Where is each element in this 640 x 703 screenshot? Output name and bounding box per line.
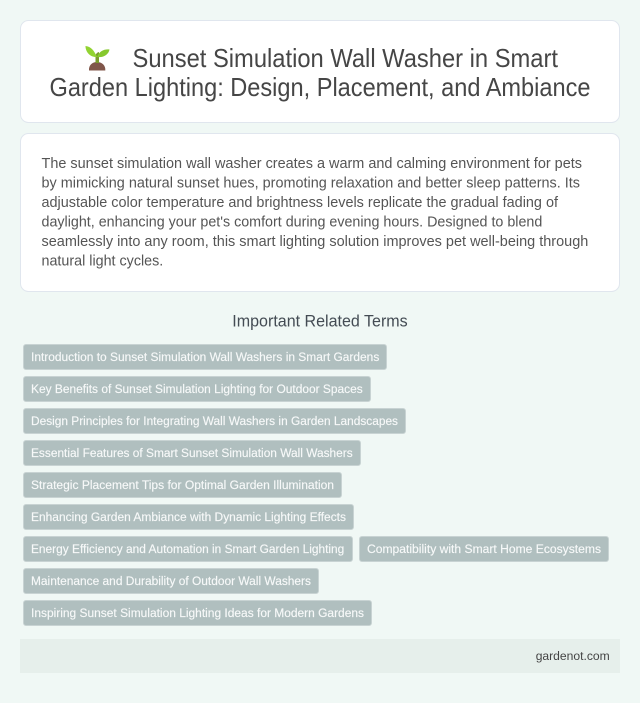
panel: description card <box>20 134 620 292</box>
footer bar <box>20 639 620 673</box>
tag: strategic placement <box>24 472 342 498</box>
text block: description: daylight, enhancing your pet's comfort during evening hours. Designed to blend <box>42 214 542 230</box>
tag: introduction: Introduction to Sunset Simulation Wall Washers in Smart Gardens <box>31 350 379 364</box>
tag: energy efficiency <box>24 536 352 562</box>
tag: enhancing ambiance <box>24 504 354 530</box>
text block: description: The sunset simulation wall washer creates a warm and calming environment for pets <box>42 156 582 172</box>
text block: description: by mimicking natural sunset hues, promoting relaxation and better sleep patterns. Its <box>42 176 580 192</box>
tag: energy efficiency: Energy Efficiency and Automation in Smart Garden Lighting <box>31 542 344 556</box>
tag: key benefits: Key Benefits of Sunset Simulation Lighting for Outdoor Spaces <box>31 382 363 396</box>
tag: design principles: Design Principles for Integrating Wall Washers in Garden Landscapes <box>31 414 398 428</box>
panel: title card <box>20 20 620 122</box>
text block: description: adjustable color temperature and brightness levels replicate the gradual fading of <box>42 195 559 211</box>
title: Sunset Simulation Wall Washer in Smart <box>132 43 559 73</box>
text block: description: seamlessly into any room, this smart lighting solution improves pet well-being through <box>42 234 588 250</box>
tag: maintenance: Maintenance and Durability of Outdoor Wall Washers <box>31 574 311 588</box>
tag: key benefits <box>24 376 370 402</box>
tag: maintenance <box>24 568 318 594</box>
title <box>50 43 590 102</box>
heading: important related terms: Important Related Terms <box>232 312 408 330</box>
tag: introduction <box>24 344 386 370</box>
tag: inspiring ideas: Inspiring Sunset Simulation Lighting Ideas for Modern Gardens <box>31 606 364 620</box>
text block: description <box>42 156 588 270</box>
icon: sprout <box>86 46 110 70</box>
panel: related term tags <box>24 344 608 626</box>
tag: inspiring ideas <box>24 600 372 626</box>
tag: enhancing ambiance: Enhancing Garden Ambiance with Dynamic Lighting Effects <box>31 510 346 524</box>
tag: essential features: Essential Features of Smart Sunset Simulation Wall Washers <box>31 446 353 460</box>
tag: design principles <box>24 408 406 434</box>
tag: strategic placement: Strategic Placement Tips for Optimal Garden Illumination <box>31 478 334 492</box>
text block: description: natural light cycles. <box>42 254 163 270</box>
tag: compatibility: Compatibility with Smart Home Ecosystems <box>367 542 601 556</box>
footer text: site name: gardenot.com <box>536 649 610 663</box>
tag: essential features <box>24 440 360 466</box>
title: Garden Lighting: Design, Placement, and Ambiance <box>50 72 590 102</box>
tag: compatibility <box>360 536 608 562</box>
